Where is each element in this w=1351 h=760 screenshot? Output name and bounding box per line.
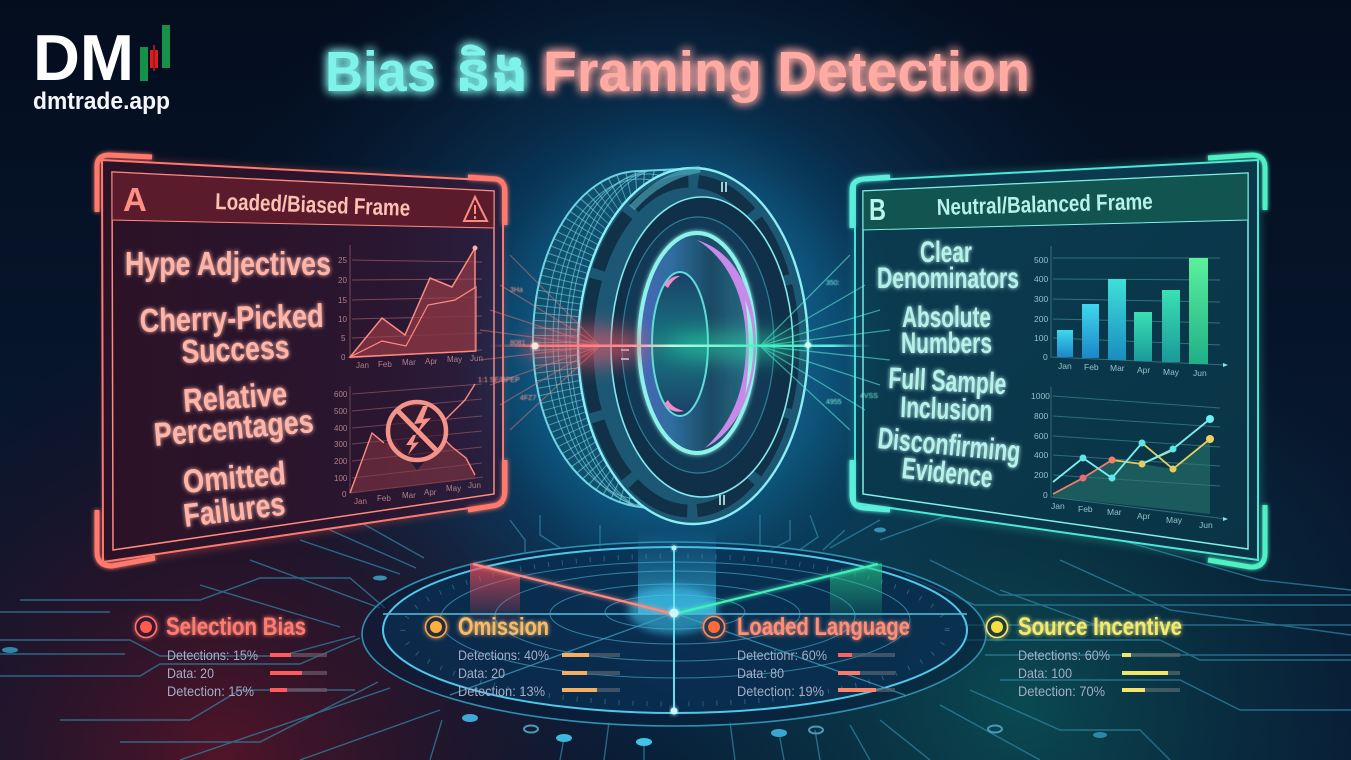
- chart: bar chart: 300: [1034, 294, 1048, 304]
- chart: omitted failures: 0: [342, 490, 347, 499]
- beam data labels: 4VSS: [860, 393, 878, 400]
- icon: marker: [426, 616, 446, 638]
- beam data labels: 3Ha: [510, 287, 523, 294]
- beam data labels: 4FZ7: [520, 395, 536, 402]
- legend: source incentive: [986, 613, 1182, 699]
- chart: line chart: Jun: [1199, 520, 1213, 530]
- legend: loaded language: Detection: 19%: [737, 683, 824, 699]
- icon: warning triangle: [464, 197, 487, 221]
- chart: line chart: [1031, 387, 1228, 530]
- panel B list: Inclusion: [900, 391, 993, 428]
- panel A list: Omitted: [181, 454, 287, 500]
- chart: line chart: Feb: [1078, 504, 1093, 514]
- legend: selection bias: Selection Bias: [166, 613, 306, 641]
- chart: omitted failures: Mar: [402, 491, 416, 500]
- chart: hype area: 15: [338, 296, 347, 305]
- chart: omitted failures: 200: [334, 457, 348, 466]
- panel A list: Success: [181, 328, 290, 370]
- chart: hype area: 0: [341, 353, 346, 362]
- title: និង: [455, 43, 529, 103]
- lens: [510, 150, 850, 540]
- circuit dots: [2, 528, 1107, 746]
- chart: line chart: 0: [1043, 490, 1048, 500]
- legend: omission: Detection: 13%: [458, 683, 545, 699]
- lens front rings: [578, 168, 808, 524]
- chart: bar chart: 500: [1034, 255, 1048, 265]
- chart: bar chart: Jan: [1058, 361, 1072, 371]
- panel A list: Hype Adjectives: [125, 245, 331, 282]
- legend: omission: Data: 20: [458, 665, 505, 681]
- legend: source incentive: Detection: 70%: [1018, 683, 1105, 699]
- chart: hype area: 10: [338, 315, 347, 324]
- chart: hype area: 25: [338, 256, 347, 265]
- circuit traces: [0, 500, 1351, 760]
- chart: bar chart: 400: [1034, 274, 1048, 284]
- beam data labels: 350:: [826, 280, 840, 287]
- chart: omitted failures: May: [446, 484, 461, 493]
- chart: bar chart: May: [1163, 367, 1180, 377]
- chart: hype area: Apr: [425, 357, 438, 366]
- panel: neutral/balanced frame: [852, 155, 1265, 567]
- legend: source incentive: Data: 100: [1018, 665, 1072, 681]
- legend: source incentive: Detections: 60%: [1018, 647, 1110, 663]
- legend: loaded language: Data: 80: [737, 665, 784, 681]
- panel: loaded/biased frame: [97, 155, 505, 566]
- panel B list: Full Sample: [888, 362, 1007, 401]
- beam data labels: 8081: [510, 340, 526, 347]
- legend: source incentive: Source Incentive: [1018, 613, 1182, 641]
- panel B frame: [852, 155, 1265, 567]
- title: Framing Detection: [543, 40, 1030, 104]
- chart: hype area: 5: [341, 334, 346, 343]
- chart: omitted failures: [334, 384, 483, 506]
- legend: loaded language: [704, 613, 910, 699]
- chart: hype area: May: [447, 355, 462, 364]
- metric bars: [838, 653, 895, 692]
- chart: omitted failures: 400: [334, 424, 348, 433]
- chart: hype area: [338, 245, 483, 370]
- panel B heading: Neutral/Balanced Frame: [936, 188, 1153, 220]
- legend: omission: Detections: 40%: [458, 647, 549, 663]
- panel A list: Cherry-Picked: [139, 297, 324, 339]
- icon: marker: [986, 616, 1008, 638]
- chart: hype area: Jun: [470, 354, 483, 363]
- icon: prohibited lightning: [388, 402, 446, 460]
- logo: [33, 21, 170, 115]
- chart: bar chart: 100: [1034, 333, 1048, 343]
- chart: line chart: 600: [1034, 431, 1048, 441]
- light beams: [480, 255, 890, 430]
- chart: line chart: 800: [1034, 411, 1048, 421]
- panel A heading: Loaded/Biased Frame: [215, 188, 411, 221]
- icon: marker: [136, 616, 156, 638]
- logo: DM: [33, 21, 134, 94]
- panel A list: Relative: [182, 375, 288, 419]
- panel A list: Percentages: [152, 402, 315, 453]
- panel A list: Failures: [181, 485, 287, 534]
- legend: selection bias: Detection: 15%: [167, 683, 254, 699]
- panel A letter: A: [123, 181, 147, 218]
- chart: bar chart: [1034, 246, 1228, 378]
- beam data labels: [478, 280, 878, 406]
- chart: omitted failures: 600: [334, 390, 348, 399]
- chart: omitted failures: 300: [334, 440, 348, 449]
- logo: dmtrade.app: [33, 88, 170, 115]
- metric bars: [1122, 653, 1180, 692]
- chart: bar chart: Apr: [1137, 365, 1150, 375]
- chart: omitted failures: 500: [334, 407, 348, 416]
- panel B list: Evidence: [900, 452, 994, 494]
- chart: hype area: Feb: [378, 360, 392, 369]
- panel B list: [876, 236, 1022, 494]
- metric bars: [562, 653, 620, 692]
- chart: line chart: May: [1166, 515, 1183, 525]
- lens barrel: [532, 167, 701, 509]
- beam data labels: 1:1 SE/BPEP: [478, 377, 520, 384]
- chart: omitted failures: 100: [334, 474, 348, 483]
- chart: line chart: Jan: [1051, 501, 1065, 511]
- legend: selection bias: [136, 613, 327, 699]
- panel B list: Denominators: [877, 262, 1019, 295]
- chart: bar chart: Mar: [1110, 363, 1125, 373]
- holographic platform: [362, 530, 986, 726]
- icon: candlesticks: [140, 25, 170, 81]
- legend: loaded language: Loaded Language: [737, 613, 910, 641]
- panel B list: Disconfirming: [876, 422, 1022, 469]
- title: [325, 40, 1030, 104]
- chart: omitted failures: Jun: [468, 481, 481, 490]
- chart: line chart: Apr: [1137, 511, 1150, 521]
- chart: bar chart: 0: [1043, 352, 1048, 362]
- chart: hype area: Jan: [356, 361, 369, 370]
- panel A list: [125, 245, 331, 534]
- title: Bias: [325, 40, 436, 104]
- legend: selection bias: Detections: 15%: [167, 647, 258, 663]
- legend: omission: Omission: [458, 613, 549, 641]
- panel B letter: B: [869, 192, 886, 227]
- legend: selection bias: Data: 20: [167, 665, 214, 681]
- beam data labels: 4955: [826, 399, 842, 406]
- metric bars: [270, 653, 327, 692]
- chart: omitted failures: Jan: [354, 497, 367, 506]
- chart: omitted failures: Apr: [424, 488, 437, 497]
- chart: bar chart: Jun: [1193, 368, 1207, 378]
- chart: hype area: Mar: [402, 358, 416, 367]
- chart: line chart: 400: [1034, 450, 1048, 460]
- panel B list: Clear: [920, 236, 972, 269]
- chart: line chart: 200: [1034, 470, 1048, 480]
- legend: omission: [426, 613, 620, 699]
- chart: line chart: Mar: [1107, 507, 1122, 517]
- chart: omitted failures: Feb: [377, 494, 391, 503]
- panel A frame: [97, 155, 505, 566]
- panel B list: Numbers: [901, 327, 992, 360]
- chart: bar chart: Feb: [1084, 362, 1099, 372]
- chart: bar chart: 200: [1034, 314, 1048, 324]
- icon: marker: [704, 616, 724, 638]
- chart: hype area: 20: [338, 276, 347, 285]
- panel B list: Absolute: [902, 301, 991, 334]
- legend: loaded language: Detectionr: 60%: [737, 647, 827, 663]
- chart: line chart: 1000: [1031, 391, 1050, 401]
